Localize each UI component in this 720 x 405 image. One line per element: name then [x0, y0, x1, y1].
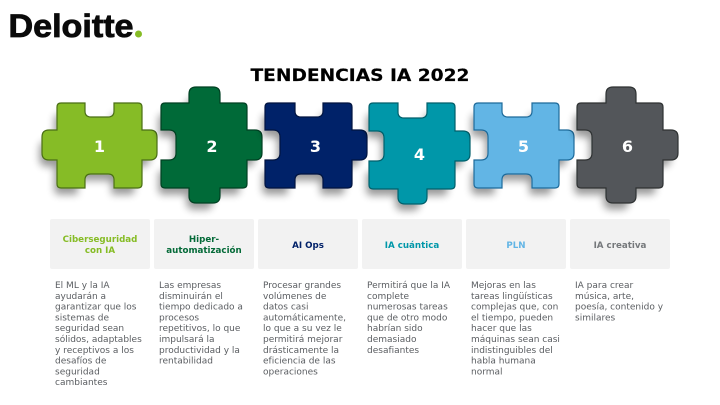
text block 2: productividad y la [159, 346, 240, 356]
text block 1: desafíos de [55, 357, 107, 367]
text block 3: automáticamente, [263, 313, 346, 323]
text block 1: seguridad [55, 367, 100, 377]
text block 4: complete [367, 292, 410, 302]
text block 1: sistemas de [55, 313, 109, 323]
text block 1: seguridad sean [55, 324, 124, 334]
text block 5: hacer que las [471, 324, 532, 334]
heading box 1: Ciberseguridad con IA: con IA [85, 246, 115, 256]
text block 2: procesos [159, 313, 199, 323]
puzzle piece 4: 4 [414, 145, 425, 164]
text block 4: Permitirá que la IA [367, 281, 451, 291]
text block 5: habla humana [471, 357, 536, 367]
puzzle piece 4 [369, 103, 470, 204]
heading box 3: AI Ops: AI Ops [292, 241, 324, 251]
text block 5: complejas que, con [471, 303, 558, 313]
text block 2: disminuirán el [159, 292, 223, 302]
text block 2: repetitivos, lo que [159, 324, 241, 334]
text block 4: numerosas tareas [367, 303, 448, 313]
text block 1: y receptivos a los [55, 346, 134, 356]
puzzle piece 6: 6 [622, 137, 633, 156]
puzzle piece 2 [161, 87, 262, 203]
text block 3: datos casi [263, 303, 308, 313]
text block 5: el tiempo, pueden [471, 313, 553, 323]
text block 3: eficiencia de las [263, 357, 336, 367]
heading box 5: PLN [466, 219, 566, 269]
text block 1: garantizar que los [55, 303, 137, 313]
text block 5: indistinguibles del [471, 346, 553, 356]
heading box 2: Hiper-automatización [154, 219, 254, 269]
text block 6: IA para crear [575, 281, 633, 291]
heading box 4: IA cuántica: IA cuántica [385, 241, 439, 251]
text block 4: desafiantes [367, 346, 419, 356]
text block 2: rentabilidad [159, 357, 213, 367]
puzzle piece 1 [42, 103, 157, 188]
title: TENDENCIAS IA 2022 [250, 66, 470, 85]
text block 1: cambiantes [55, 378, 108, 388]
heading box 1: Ciberseguridad con IA: Ciberseguridad [63, 235, 137, 245]
heading box 6: IA creativa [570, 219, 670, 269]
text block 5: máquinas sean casi [471, 335, 560, 345]
heading box 3: AI Ops [258, 219, 358, 269]
text block 3: permitirá mejorar [263, 335, 343, 345]
text block 6: similares [575, 313, 616, 323]
text block 2: tiempo dedicado a [159, 303, 243, 313]
text block 5: tareas lingüísticas [471, 292, 553, 302]
heading box 2: Hiper-automatización: automatización [166, 245, 242, 256]
text block 1: ayudarán a [55, 292, 106, 302]
heading box 4: IA cuántica [362, 219, 462, 269]
text block 3: Procesar grandes [263, 281, 341, 291]
puzzle piece 1: 1 [94, 137, 105, 156]
text block 3: drásticamente la [263, 346, 339, 356]
heading box 5: PLN: PLN [506, 241, 526, 251]
puzzle piece 3 [265, 103, 367, 188]
text block 1: El ML y la IA [55, 281, 110, 291]
text block 2: Las empresas [159, 281, 221, 291]
puzzle piece 2: 2 [206, 137, 218, 156]
puzzle piece 5: 5 [518, 137, 529, 156]
heading box 1: Ciberseguridad con IA [50, 219, 150, 269]
text block 2: impulsará la [159, 335, 214, 345]
text block 4: que de otro modo [367, 313, 448, 323]
text block 3: lo que a su vez le [263, 324, 342, 334]
text block 1: sólidos, adaptables [55, 334, 142, 345]
text block 5: normal [471, 367, 503, 377]
text block 3: operaciones [263, 367, 318, 377]
text block 6: música, arte, [575, 292, 634, 302]
logo: Deloitte: Deloitte [8, 8, 134, 44]
heading box 6: IA creativa: IA creativa [594, 241, 647, 251]
text block 4: demasiado [367, 335, 417, 345]
puzzle piece 3: 3 [310, 137, 321, 156]
text block 4: habrían sido [367, 324, 423, 334]
text block 6: poesía, contenido y [575, 303, 664, 313]
puzzle piece 6 [577, 87, 678, 203]
puzzle piece 5 [474, 103, 574, 188]
text block 5: Mejoras en las [471, 281, 536, 291]
text block 3: volúmenes de [263, 292, 327, 302]
heading box 2: Hiper-automatización: Hiper- [189, 235, 220, 245]
